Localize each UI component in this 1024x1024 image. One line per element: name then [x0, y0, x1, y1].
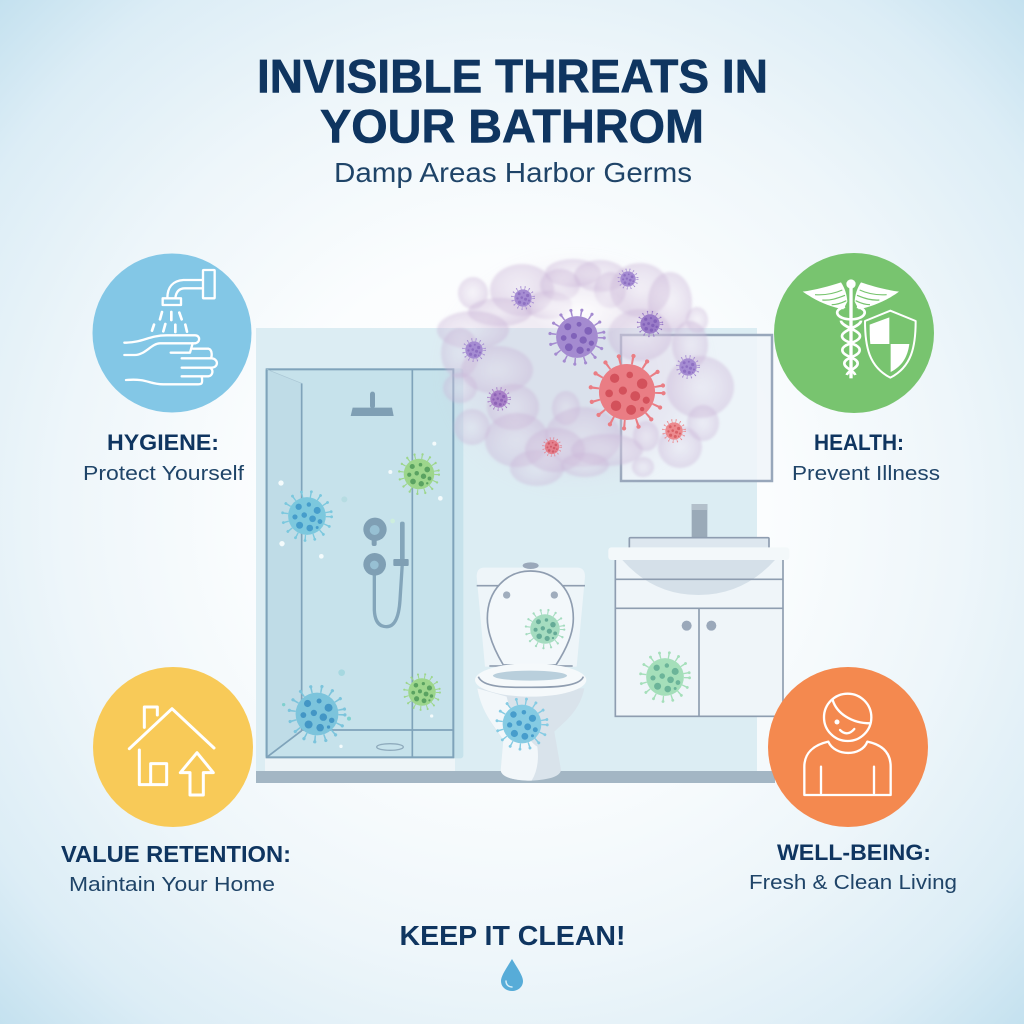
- panel: health: [774, 253, 940, 485]
- panel: well-being: [749, 667, 957, 894]
- germs on fixtures: [282, 454, 690, 749]
- label: health: Prevent Illness: [792, 462, 940, 485]
- label: hygiene: [83, 430, 244, 485]
- panel: bathroom scene: [256, 259, 789, 783]
- title: INVISIBLE THREATS IN: [257, 50, 768, 104]
- label: hygiene: Protect Yourself: [83, 462, 244, 485]
- toilet: [475, 562, 586, 781]
- shower: [265, 368, 463, 771]
- germs in cloud: [463, 269, 699, 456]
- label: well-being: [749, 840, 957, 894]
- icon: smiling person: [768, 667, 928, 827]
- panel: value retention: [61, 667, 291, 896]
- call to action: KEEP IT CLEAN!: [400, 920, 626, 951]
- label: health: HEALTH:: [814, 430, 904, 455]
- label: value retention: VALUE RETENTION:: [61, 841, 291, 867]
- sink and vanity cabinet: [608, 504, 789, 716]
- label: value retention: [61, 841, 291, 896]
- wall mirror: [621, 335, 772, 481]
- title: [257, 50, 768, 154]
- icon: water drop: [501, 959, 523, 991]
- icon: washing hands under tap: [92, 254, 252, 412]
- germ cloud: [437, 259, 734, 486]
- icon: caduceus and shield: [774, 253, 934, 413]
- label: well-being: WELL-BEING:: [777, 840, 931, 865]
- floor: [256, 771, 775, 783]
- subtitle: Damp Areas Harbor Germs: [334, 157, 692, 188]
- icon: house with up arrow: [93, 667, 253, 827]
- shower controls and hose: [363, 518, 409, 627]
- shower head: [351, 392, 394, 416]
- label: value retention: Maintain Your Home: [69, 873, 275, 896]
- label: hygiene: HYGIENE:: [107, 430, 219, 455]
- water sparkles: [278, 442, 443, 748]
- room wall: [256, 328, 757, 772]
- panel: hygiene: [83, 254, 252, 485]
- label: well-being: Fresh & Clean Living: [749, 871, 957, 894]
- label: health: [792, 430, 940, 485]
- title: YOUR BATHROM: [320, 100, 704, 154]
